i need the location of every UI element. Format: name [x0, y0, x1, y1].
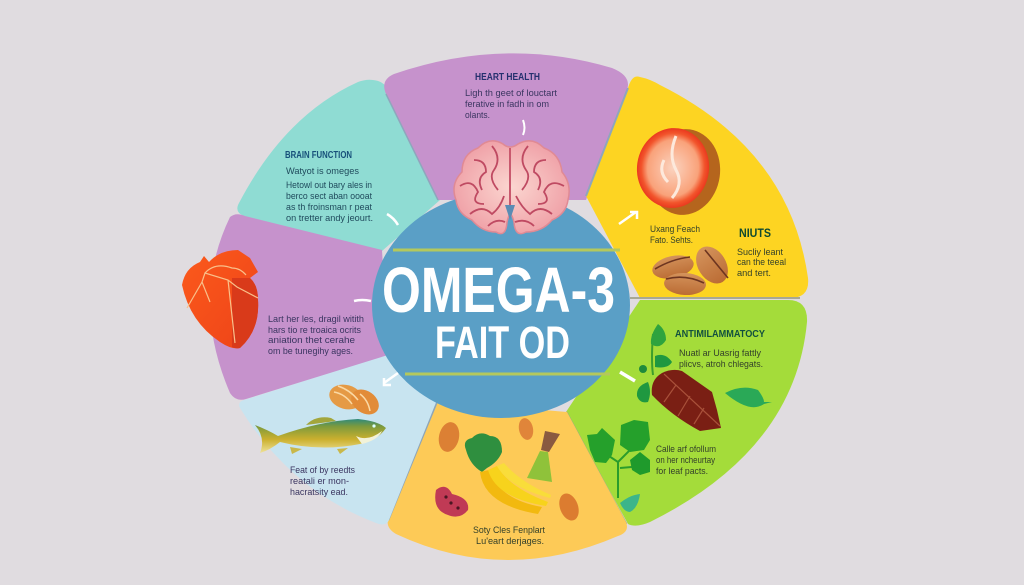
text: fruit caption: Fato. Sehts.: [650, 235, 693, 246]
arrow: to chocolate: [620, 372, 635, 381]
icon: fruit slice: [632, 123, 726, 220]
text: heart body: aniation thet cerahe: [268, 335, 355, 346]
arrow: to heart organ: [354, 300, 371, 301]
icon: shellfish: [326, 381, 384, 420]
text: anti-inflammatory body: [679, 348, 763, 370]
panel: anti-inflammatory: [566, 300, 807, 526]
heading: brain function: BRAIN FUNCTION: [285, 149, 352, 161]
text: nuts body: Sucliy leant: [737, 247, 783, 258]
panel: foods: [388, 401, 627, 560]
text: anti-inflammatory body: Nuatl ar Uasrig fattly: [679, 348, 761, 359]
text: leaf caption: on her ncheurtay: [656, 455, 715, 466]
icon: foods: [435, 417, 582, 523]
text: leaf caption: Calle arf ofollum: [656, 444, 716, 455]
text: heart body: hars tio re troaica ocrits: [268, 325, 361, 336]
heading: anti-inflammatory: ANTIMILAMMATOCY: [675, 328, 765, 340]
icon: chocolate and plant: [637, 324, 721, 431]
icon: leaf: [725, 388, 772, 407]
text: heart health body: Ligh th geet of louctart: [465, 88, 557, 99]
text: foods caption: Soty Cles Fenplart: [473, 525, 545, 536]
text: brain function body: [286, 166, 373, 224]
text: heart health body: olants.: [465, 110, 490, 121]
panel: heart health: [384, 53, 628, 200]
text: fruit caption: Uxang Feach: [650, 224, 700, 235]
text: brain function body: on tretter andy jeourt.: [286, 213, 373, 224]
arrow: to fruit: [619, 212, 637, 224]
title: omega-3: OMEGA-3: [382, 254, 615, 326]
arrow: to brain function: [387, 214, 398, 225]
subtitle: FAIT OD: [435, 317, 570, 368]
center circle: [372, 192, 630, 418]
icon: leafy sprig: [587, 420, 650, 512]
text: fish caption: [290, 465, 355, 498]
text: brain function body: as th froinsman r peat: [286, 202, 372, 213]
heading: heart health: HEART HEALTH: [475, 71, 540, 83]
text: brain function body: berco sect aban oooat: [286, 191, 372, 202]
text: fish caption: reatali er mon-: [290, 476, 349, 487]
arrow: to heart health: [523, 120, 524, 135]
text: foods caption: Lu'eart derjages.: [476, 536, 544, 547]
text: nuts body: can the teeal: [737, 257, 786, 268]
text: brain function body: Watyot is omeges: [286, 166, 359, 177]
icon: heart organ: [182, 250, 258, 348]
text: leaf caption: [656, 444, 716, 477]
heading: nuts: NIUTS: [739, 226, 771, 240]
icon: brain: [454, 141, 569, 234]
text: brain function body: Hetowl out bary ales in: [286, 180, 372, 191]
text: leaf caption: for leaf pacts.: [656, 466, 708, 477]
arrow: to fish: [384, 373, 398, 385]
text: fish caption: hacratsity ead.: [290, 487, 348, 498]
text: heart body: om be tunegihy ages.: [268, 346, 353, 357]
panel: brain function: [237, 80, 440, 251]
text: anti-inflammatory body: plicvs, atroh chlegats.: [679, 359, 763, 370]
text: heart body: [268, 314, 364, 357]
text: fish caption: Feat of by reedts: [290, 465, 355, 476]
panel: heart: [210, 214, 388, 400]
panel: fish: [239, 355, 437, 524]
text: foods caption: [473, 525, 545, 547]
panel: nuts: [586, 76, 808, 298]
text: nuts body: [737, 247, 786, 279]
text: nuts body: and tert.: [737, 268, 771, 279]
icon: nuts: [650, 241, 734, 296]
text: heart body: Lart her les, dragil witith: [268, 314, 364, 325]
icon: fish: [255, 417, 386, 454]
text: fruit caption: [650, 224, 700, 246]
text: heart health body: [465, 88, 557, 121]
text: heart health body: ferative in fadh in om: [465, 99, 549, 110]
